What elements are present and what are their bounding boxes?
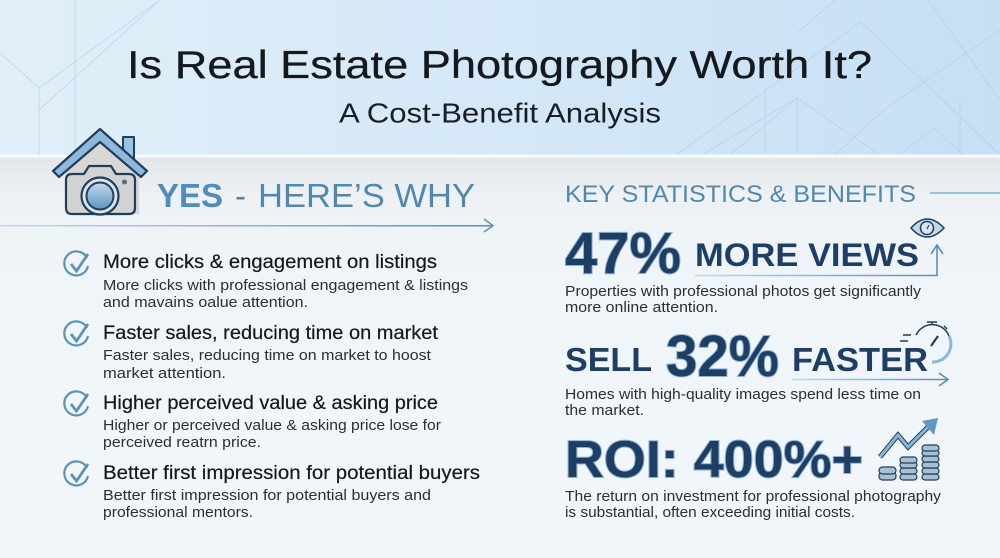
list item: faster sales: Faster sales, reducing time on market to hoost [103,348,431,364]
icon: house with camera [53,129,147,214]
stat: sell 32% faster: Homes with high-quality images spend less time on [565,387,921,403]
stat: sell 32% faster [565,322,951,419]
stat: roi 400%: is substantial, often exceeding initial costs. [565,505,855,521]
arrow: left divider [0,219,493,232]
stat: sell 32% faster: the market. [565,403,644,419]
panel: header background [0,0,1000,156]
subtitle: A Cost-Benefit Analysis [339,98,661,128]
stat: 47% more views: more online attention. [565,300,718,316]
panel: benefits list [64,251,480,521]
arrow: up [695,245,943,276]
heading: yes here's why: YES [157,178,223,215]
list item: faster sales: market attention. [103,366,226,382]
heading: yes here's why: HERE’S WHY [258,178,475,215]
heading: key statistics: KEY STATISTICS & BENEFITS [565,181,916,208]
list item: more clicks [64,251,468,311]
icon: check [64,461,88,485]
list item: first impression: professional mentors. [103,505,253,521]
icon: check [64,321,88,345]
stat: sell 32% faster: 32% [666,324,779,389]
list item: more clicks: and mavains oalue attention. [103,295,308,311]
list item: higher value: Higher or perceived value & asking price lose for [103,418,441,434]
stat: roi 400%: ROI: 400%+ [565,431,863,489]
stat: 47% more views: Properties with professional photos get significantly [565,284,922,300]
list item: first impression [64,461,480,521]
list item: higher value: Higher perceived value & asking price [103,393,438,414]
list item: first impression: Better first impression for potential buyers [103,463,480,484]
list item: more clicks: More clicks with professional engagement & listings [103,278,468,294]
icon: chart arrow and coins [879,418,939,480]
divider line: key statistics [930,192,1000,194]
arrow: right [792,373,948,386]
list item: faster sales [64,321,439,382]
list item: higher value: perceived reatrn price. [103,435,261,451]
title: Is Real Estate Photography Worth It? [127,44,872,87]
list item: first impression: Better first impression for potential buyers and [103,488,431,504]
heading: yes here's why: - [235,178,246,215]
icon: check [64,391,88,415]
stat: 47% more views: 47% [565,221,681,286]
stat: sell 32% faster: FASTER [792,342,928,379]
stat: roi 400%: The return on investment for professional photography [565,489,942,505]
stat: 47% more views [565,219,944,316]
panel: body background [0,154,1000,558]
list item: higher value [64,391,441,451]
heading: yes here's why [157,178,475,215]
list item: faster sales: Faster sales, reducing time on market [103,323,439,344]
icon: check [64,251,88,275]
list item: more clicks: More clicks & engagement on listings [103,252,437,273]
icon: stopwatch [900,322,951,362]
icon: eye [911,219,944,237]
stat: roi 400% [565,418,942,521]
stat: 47% more views: MORE VIEWS [695,237,919,273]
stat: sell 32% faster: SELL [565,342,652,379]
